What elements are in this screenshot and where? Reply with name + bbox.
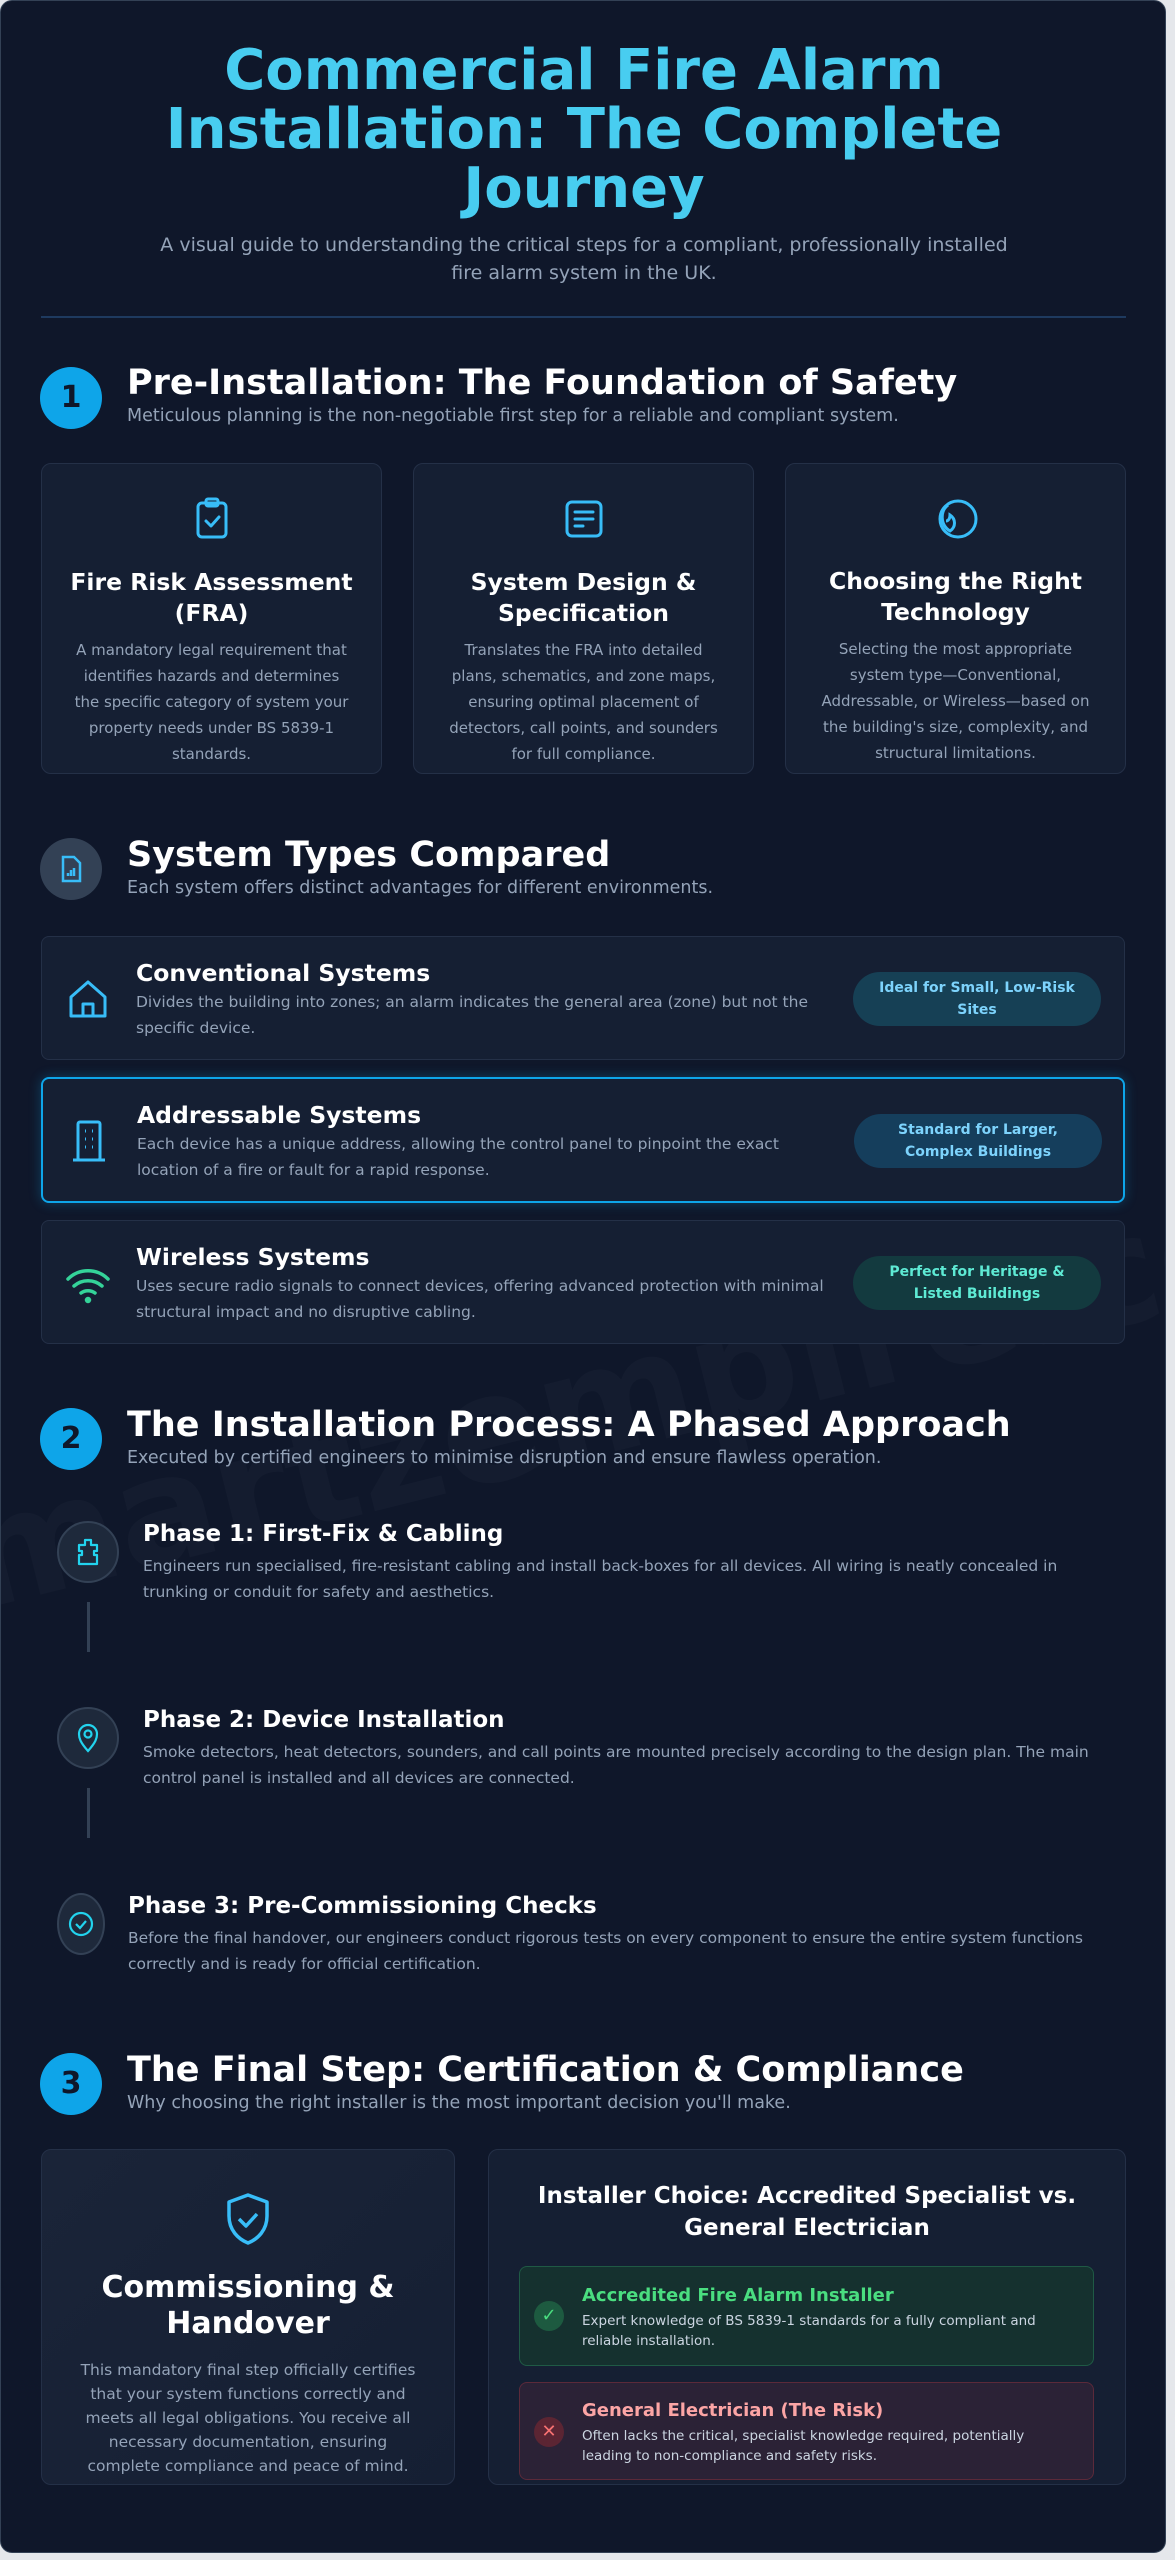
- panel: installer choice: General Electrician: [684, 2215, 930, 2241]
- row: addressable: Each device has a unique address, allowing the control panel to pinpoint the exact location of a fire or fault for a rapid response.: [137, 1135, 779, 1179]
- phase 3: [57, 1893, 1083, 1973]
- icon: house: [70, 980, 106, 1018]
- panel: installer choice: [488, 2149, 1126, 2485]
- callout: general electrician: ✕: [541, 2421, 557, 2442]
- section header: system types: Each system offers distinct advantages for different environments.: [127, 878, 713, 898]
- row: addressable: [41, 1077, 1125, 1203]
- section 2 header: Executed by certified engineers to minimise disruption and ensure flawless operation.: [127, 1448, 881, 1468]
- title: Installation: The Complete: [166, 97, 1002, 162]
- row: wireless: Perfect for Heritage &: [889, 1264, 1065, 1280]
- phase 1: Engineers run specialised, fire-resistant cabling and install back-boxes for all devices. All wiring is neatly concealed in trunking or conduit for safety and aesthetics.: [143, 1557, 1057, 1601]
- row: conventional: Divides the building into zones; an alarm indicates the general area (zone) but not the specific device.: [136, 993, 808, 1037]
- icon: check circle: [57, 1893, 105, 1955]
- panel: commissioning: [41, 2149, 455, 2485]
- callout: accredited: [519, 2266, 1094, 2366]
- callout: accredited: ✓: [541, 2305, 557, 2326]
- icon: document: [566, 500, 602, 538]
- subtitle: [160, 234, 1008, 284]
- callout: general electrician: Often lacks the critical, specialist knowledge required, potentially leading to non-compliance and safety risks.: [582, 2428, 1024, 2464]
- phase 1: [57, 1521, 1057, 1601]
- row: addressable: Addressable Systems: [137, 1101, 421, 1129]
- section 3 header: Why choosing the right installer is the most important decision you'll make.: [127, 2093, 791, 2113]
- phase 3: Phase 3: Pre-Commissioning Checks: [128, 1893, 597, 1919]
- section 2 header: [40, 1405, 1011, 1470]
- row: conventional: [41, 936, 1125, 1060]
- row: addressable: Complex Buildings: [905, 1144, 1051, 1160]
- section 1 header: [40, 363, 957, 429]
- phase 2: [57, 1707, 1089, 1787]
- phase 2: Smoke detectors, heat detectors, sounders, and call points are mounted precisely according to the design plan. The main control panel is installed and all devices are connected.: [143, 1743, 1089, 1787]
- title: Journey: [463, 156, 705, 221]
- section 2 header: 2: [61, 1421, 81, 1456]
- card: System design: System Design &: [471, 568, 696, 596]
- section 1 header: Meticulous planning is the non-negotiable first step for a reliable and compliant system.: [127, 406, 899, 426]
- row: conventional: Ideal for Small, Low-Risk: [879, 980, 1075, 996]
- phase 3: Before the final handover, our engineers conduct rigorous tests on every component to ensure the entire system functions correctly and is ready for official certification.: [128, 1929, 1083, 1973]
- phase 2: Phase 2: Device Installation: [143, 1707, 505, 1733]
- title: [166, 38, 1002, 221]
- row: wireless: Listed Buildings: [914, 1286, 1040, 1302]
- card: FRA: (FRA): [175, 599, 248, 627]
- section 1 header: 1: [61, 380, 81, 415]
- icon: location pin: [57, 1707, 119, 1769]
- phase 1: Phase 1: First-Fix & Cabling: [143, 1521, 503, 1547]
- icon: puzzle: [57, 1521, 119, 1583]
- card: technology: Technology: [881, 598, 1030, 626]
- card: System design: Specification: [498, 599, 669, 627]
- section 3 header: 3: [61, 2066, 81, 2101]
- panel: installer choice: Installer Choice: Accredited Specialist vs.: [538, 2183, 1076, 2209]
- card: FRA: A mandatory legal requirement that identifies hazards and determines the specific category of system your property needs under BS 5839-1 standards.: [75, 641, 348, 763]
- section header: system types: [40, 835, 713, 900]
- title: Commercial Fire Alarm: [224, 38, 944, 103]
- row: conventional: Conventional Systems: [136, 959, 430, 987]
- callout: accredited: Accredited Fire Alarm Installer: [582, 2285, 894, 2306]
- icon: flame circle: [938, 500, 978, 538]
- section 3 header: [40, 2050, 964, 2115]
- callout: general electrician: General Electrician (The Risk): [582, 2400, 883, 2421]
- icon: building: [73, 1120, 105, 1162]
- section header: system types: System Types Compared: [127, 835, 610, 875]
- icon: shield: [227, 2193, 269, 2245]
- section 3 header: The Final Step: Certification & Compliance: [127, 2050, 964, 2090]
- card: technology: Selecting the most appropriate system type—Conventional, Addressable, or Wireless—based on the building's size, complexity, and structural limitations.: [822, 640, 1090, 762]
- row: conventional: Sites: [957, 1002, 997, 1018]
- subtitle: fire alarm system in the UK.: [451, 262, 717, 284]
- row: wireless: Wireless Systems: [136, 1243, 370, 1271]
- card: FRA: Fire Risk Assessment: [70, 568, 353, 596]
- subtitle: A visual guide to understanding the critical steps for a compliant, professionally installed: [160, 234, 1008, 256]
- icon: clipboard: [196, 498, 228, 538]
- card: System design: [413, 463, 754, 774]
- card: technology: Choosing the Right: [829, 567, 1082, 595]
- row: wireless: [41, 1220, 1125, 1344]
- section 2 header: The Installation Process: A Phased Approach: [127, 1405, 1011, 1445]
- card: technology: [785, 463, 1126, 774]
- card: System design: Translates the FRA into detailed plans, schematics, and zone maps, ensuring optimal placement of detectors, call points, and sounders for full compliance.: [449, 641, 718, 763]
- callout: accredited: Expert knowledge of BS 5839-1 standards for a fully compliant and reliable installation.: [582, 2313, 1036, 2349]
- row: wireless: Uses secure radio signals to connect devices, offering advanced protection with minimal structural impact and no disruptive cabling.: [136, 1277, 824, 1321]
- callout: general electrician: [519, 2382, 1094, 2480]
- icon: wifi: [66, 1269, 110, 1304]
- panel: commissioning: Handover: [166, 2306, 330, 2341]
- icon: document chart: [40, 838, 102, 900]
- card: FRA: [41, 463, 382, 774]
- row: addressable: Standard for Larger,: [898, 1122, 1058, 1138]
- panel: commissioning: This mandatory final step officially certifies that your system functions correctly and meets all legal obligations. You receive all necessary documentation, ensuring complete compliance and peace of mind.: [81, 2361, 415, 2475]
- section 1 header: Pre-Installation: The Foundation of Safety: [127, 363, 957, 403]
- panel: commissioning: Commissioning &: [101, 2270, 395, 2305]
